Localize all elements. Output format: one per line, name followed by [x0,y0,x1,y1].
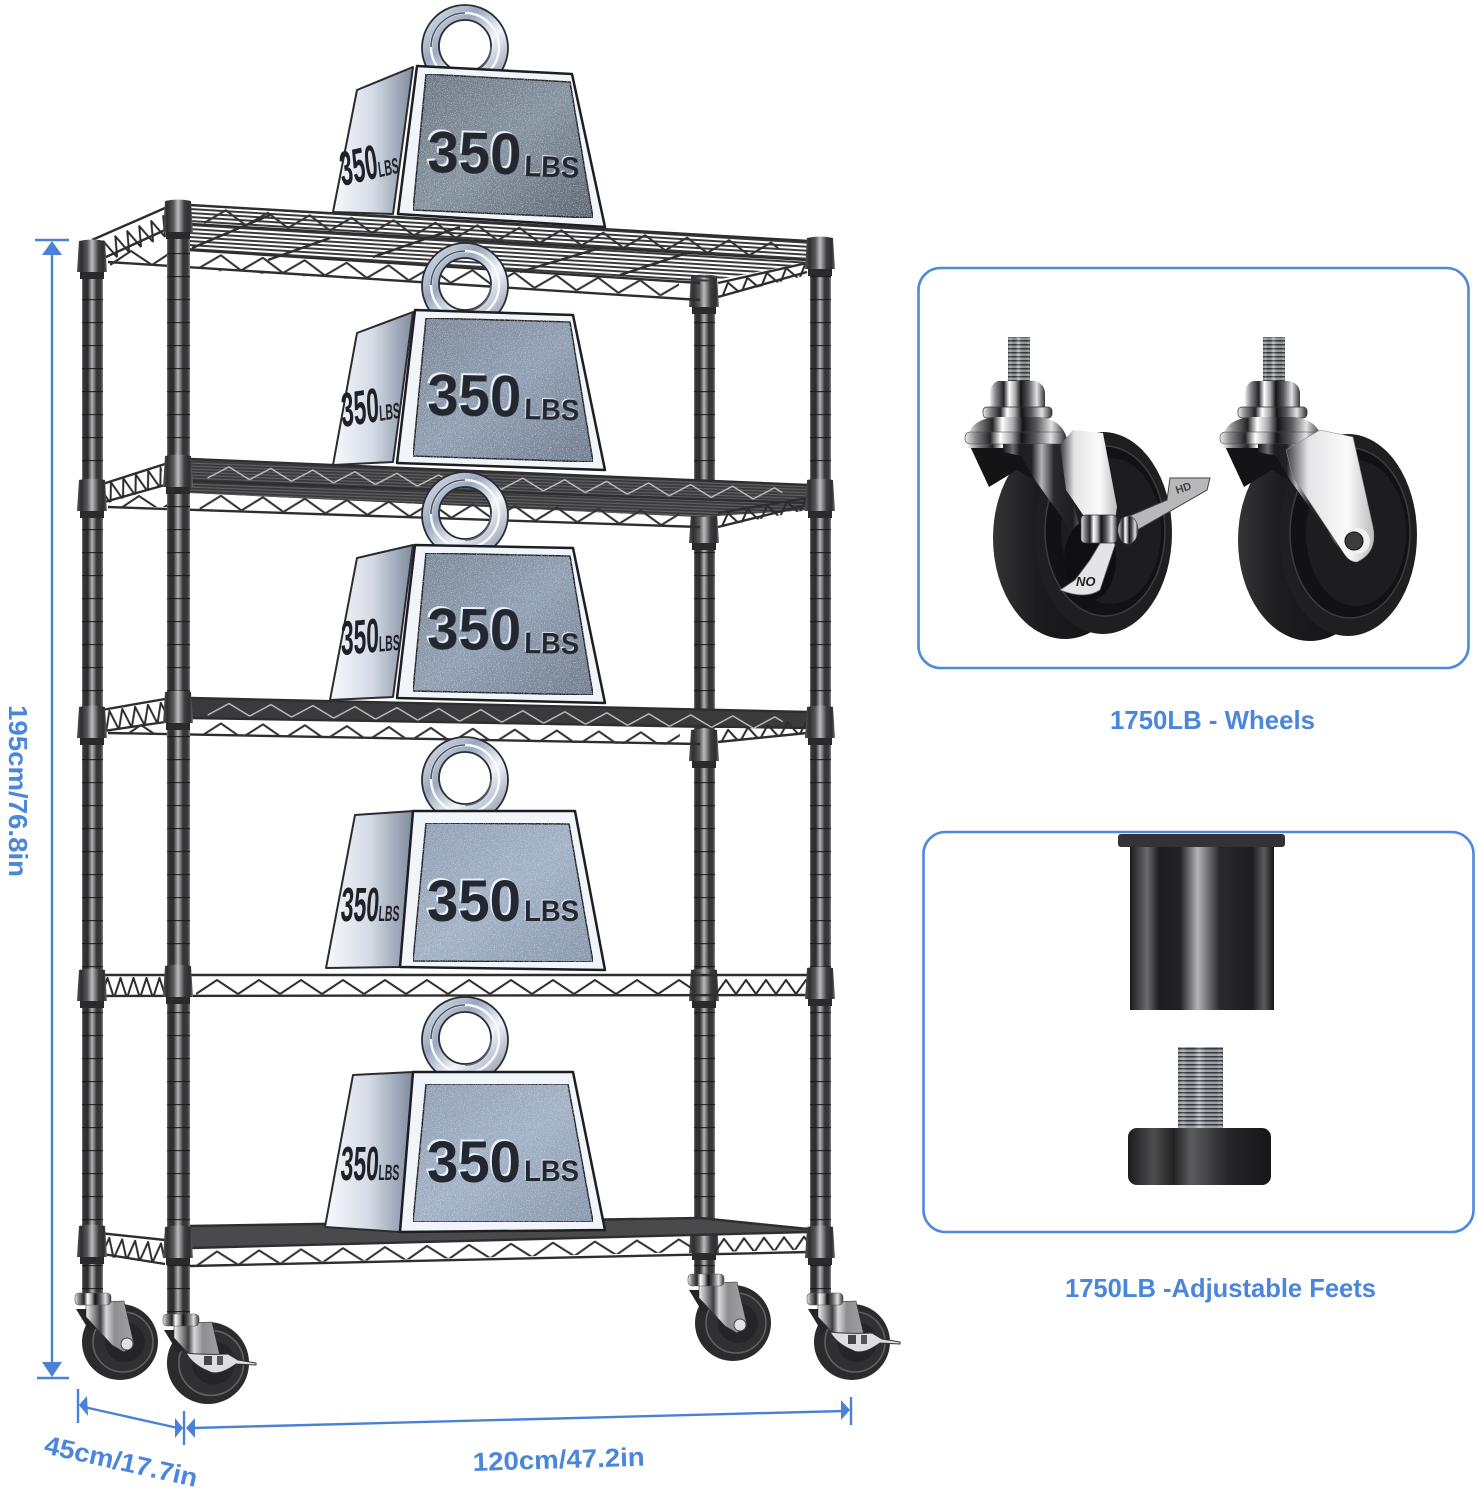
icon: caster without brake [1220,337,1417,641]
weight 3: 350 LBS: 350 [427,597,522,663]
dimension arrow: depth [78,1389,184,1445]
weight 3: 350 LBS [330,472,605,703]
weight 2: 350 LBS: 350 [427,363,522,430]
weight 2: 350 LBS [333,243,605,470]
weight 4: 350 LBS [326,737,605,970]
weight 3: 350 LBS: LBS [524,627,579,661]
weight 1: 350 LBS: 350 [427,120,522,187]
caption: adjustable feet: 1750LB -Adjustable Feets [1065,1273,1376,1303]
shelf 2 [90,459,811,527]
weight 5: 350 LBS: 350LBS [339,1138,401,1191]
shelf 4 [85,975,808,996]
weight 1: 350 LBS: LBS [524,150,580,185]
post: rear right [689,274,719,1282]
icon: caster with brake: NO [1076,574,1096,589]
shelf 1 [92,205,810,300]
weight 3: 350 LBS: 350LBS [341,607,400,666]
weight 1: 350 LBS: 350LBS [337,130,401,197]
dimension label: height: 195cm/76.8in [3,705,33,877]
shelving rack [75,200,900,1404]
post: rear left [82,262,103,1300]
shelf 5 [88,1218,808,1266]
dimension label: depth: 45cm/17.7in [42,1430,200,1491]
post: front left [163,200,193,1314]
weight 4: 350 LBS: 350 [427,869,521,934]
icon: threaded foot [1128,1047,1271,1185]
dimension label: width: 120cm/47.2in [472,1442,645,1477]
shelf 3 [90,698,811,745]
caption: wheels: 1750LB - Wheels [1110,705,1315,735]
weight 5: 350 LBS [325,997,605,1232]
caster: front left with brake [163,1314,256,1404]
icon: leg sleeve [1118,834,1285,1010]
weight 2: 350 LBS: 350LBS [340,375,401,438]
front right post collars [805,236,835,1265]
weight 5: 350 LBS: 350 [427,1130,521,1195]
panel: adjustable feet [924,832,1474,1232]
panel: wheels [918,268,1468,668]
dimension arrow: width [186,1397,851,1438]
weight 5: 350 LBS: LBS [524,1155,579,1188]
caster: rear right [688,1274,771,1361]
post: front right [810,262,831,1298]
weight 2: 350 LBS: LBS [524,393,580,427]
rear left post collars [77,240,107,1264]
icon: caster with brake: HD [1174,481,1193,497]
caster: front right with brake [807,1293,900,1380]
caster: rear left [75,1293,158,1380]
weight 4: 350 LBS: 350LBS [339,879,402,932]
weight 1: 350 LBS [333,5,605,227]
weight 4: 350 LBS: LBS [524,895,579,928]
dimension arrow: height [35,240,69,1378]
icon: caster with brake [965,337,1210,639]
